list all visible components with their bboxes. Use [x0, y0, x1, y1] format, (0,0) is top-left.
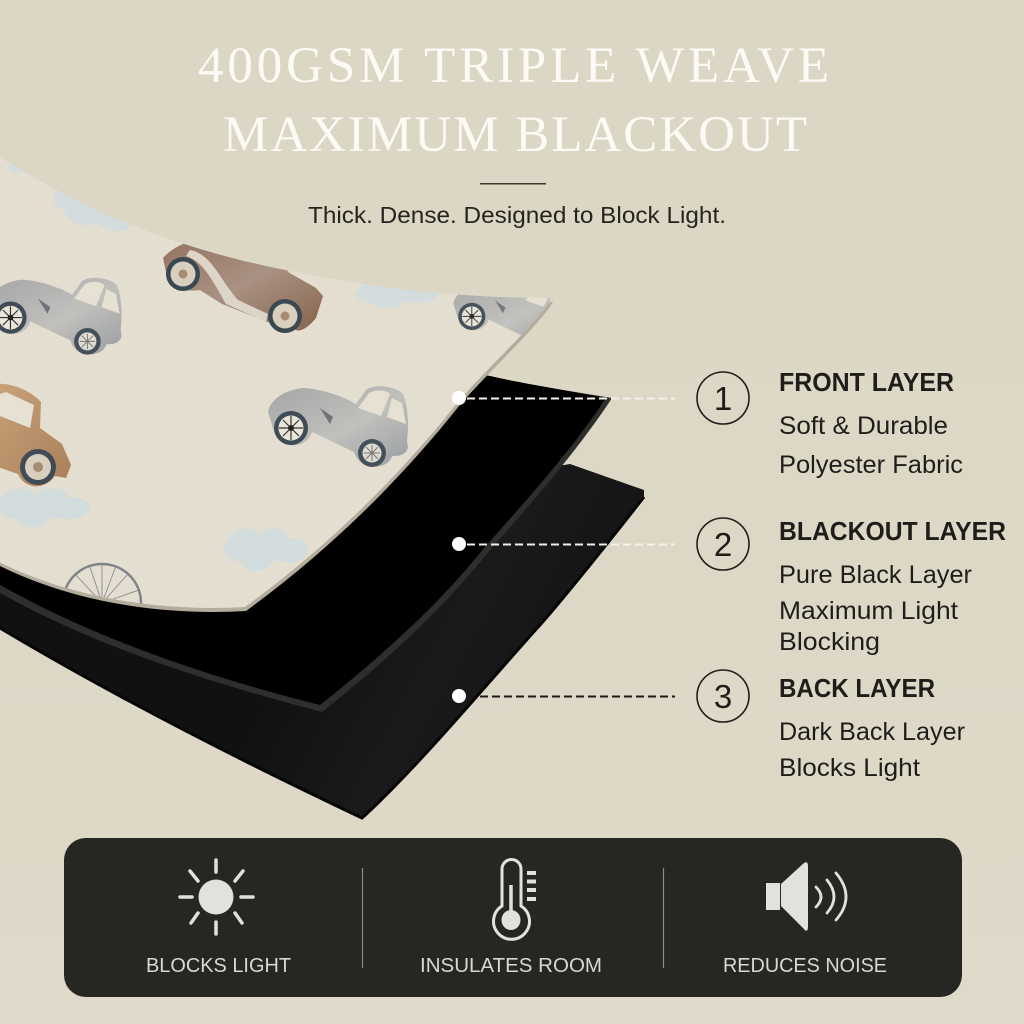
title: MAXIMUM BLACKOUT	[223, 107, 807, 163]
callout dots and leader lines	[452, 391, 675, 703]
callout 2: blackout layer	[697, 516, 1006, 656]
subtitle: Thick. Dense. Designed to Block Light.	[308, 202, 726, 228]
callout 1: front layer: 1	[714, 380, 732, 417]
grey car, right	[268, 386, 408, 467]
blackout layer	[0, 370, 612, 712]
callout 2: blackout layer: BLACKOUT LAYER	[779, 516, 1006, 546]
grey car, left	[0, 278, 122, 355]
title	[198, 38, 829, 163]
benefits panel	[64, 838, 962, 997]
icon: sun	[180, 860, 253, 934]
label: reduces noise: REDUCES NOISE	[723, 955, 887, 977]
callout 2: blackout layer: Pure Black Layer	[779, 561, 972, 589]
back layer	[0, 464, 644, 818]
callout 1: front layer	[697, 367, 963, 479]
callout 3: back layer: BACK LAYER	[779, 673, 935, 703]
layered fabric illustration	[0, 154, 675, 818]
callout 2: blackout layer: 2	[714, 526, 732, 563]
callout 2: blackout layer: Maximum Light	[779, 597, 958, 625]
front layer fabric	[0, 154, 565, 642]
callout 3: back layer: Dark Back Layer	[779, 718, 965, 746]
callout 3: back layer: Blocks Light	[779, 754, 920, 782]
callout 3: back layer	[697, 670, 965, 782]
bicycle wheel	[63, 564, 141, 642]
grey car, cut off at corner	[454, 294, 551, 335]
brown car	[163, 240, 323, 333]
callout 1: front layer: Soft & Durable	[779, 412, 948, 440]
callout 1: front layer: Polyester Fabric	[779, 451, 963, 479]
callout 2: blackout layer: Blocking	[779, 628, 880, 656]
callout 1: front layer: FRONT LAYER	[779, 367, 954, 397]
tan car	[0, 384, 71, 486]
title: 400GSM TRIPLE WEAVE	[198, 38, 829, 94]
label: insulates room: INSULATES ROOM	[420, 955, 602, 977]
callout 3: back layer: 3	[714, 678, 732, 715]
icon: thermometer	[494, 860, 536, 939]
fabric print: cars and clouds	[0, 164, 551, 604]
label: blocks light: BLOCKS LIGHT	[146, 955, 291, 977]
icon: speaker	[766, 862, 846, 931]
